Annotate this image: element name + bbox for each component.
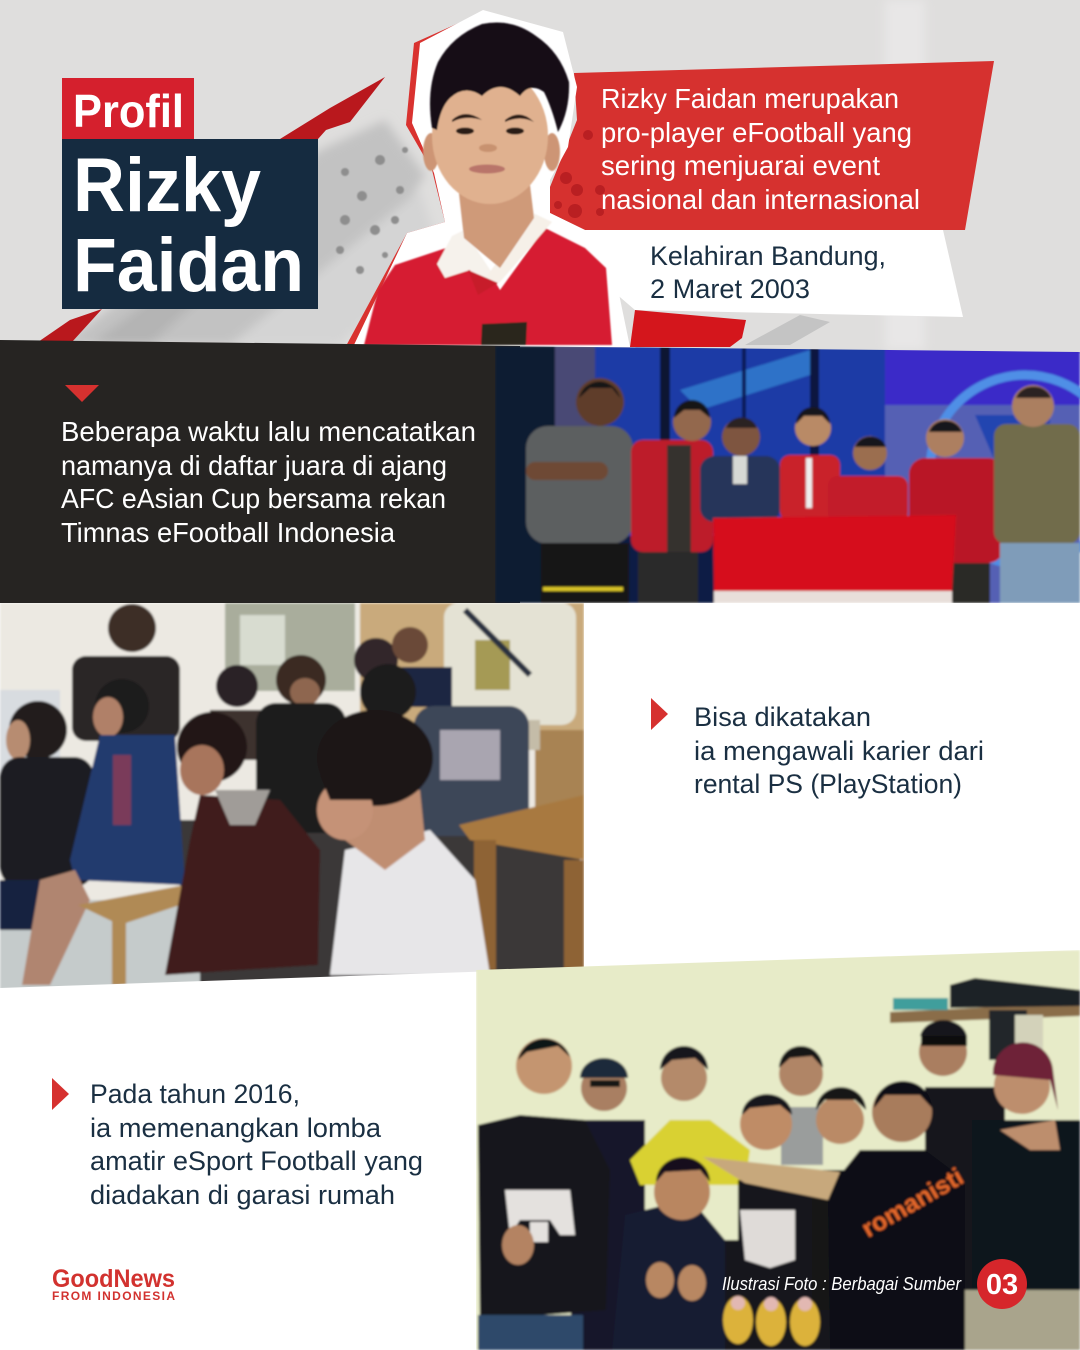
career text: Bisa dikatakan xyxy=(694,702,871,732)
lower dark mass of group xyxy=(722,1238,832,1350)
photo: garage tournament group xyxy=(476,950,1080,1350)
birth text xyxy=(650,241,886,304)
logo: GoodNews from Indonesia: FROM INDONESIA xyxy=(52,1289,175,1303)
competition text: diadakan di garasi rumah xyxy=(90,1180,395,1210)
cardboard placard xyxy=(703,1157,840,1200)
right man xyxy=(972,1120,1080,1295)
title block xyxy=(62,78,318,309)
blue hoodie man xyxy=(95,679,149,733)
trophies xyxy=(723,1296,820,1346)
person 5 xyxy=(828,476,908,522)
left man xyxy=(516,1038,572,1094)
front man xyxy=(642,1206,726,1350)
icon: red right triangle xyxy=(52,1078,69,1110)
competition text xyxy=(90,1079,423,1210)
logo: GoodNews from Indonesia: GoodNews xyxy=(52,1265,175,1293)
flag xyxy=(713,515,956,592)
competition text: amatir eSport Football yang xyxy=(90,1146,423,1176)
achievement text: Timnas eFootball Indonesia xyxy=(61,517,395,548)
label: Profil: Profil xyxy=(73,85,184,137)
hair xyxy=(430,22,569,132)
neck and face xyxy=(458,185,534,268)
boy beside xyxy=(818,1168,846,1308)
name: Rizky Faidan xyxy=(62,139,318,309)
red brush strokes xyxy=(38,77,385,342)
name: Rizky Faidan: Rizky xyxy=(73,143,261,228)
brown hoodie man xyxy=(165,795,320,975)
person 1 xyxy=(526,426,633,544)
achievement text: Beberapa waktu lalu mencatatkan xyxy=(61,416,476,447)
credit caption: Ilustrasi Foto : Berbagai Sumber xyxy=(722,1274,962,1294)
achievement text xyxy=(61,416,476,548)
name: Rizky Faidan: Faidan xyxy=(73,223,304,308)
standing white-shirt man xyxy=(444,603,576,725)
person 3 xyxy=(700,456,780,522)
competition text: Pada tahun 2016, xyxy=(90,1079,300,1109)
white text panel: 2016 competition xyxy=(52,1078,423,1210)
red description panel xyxy=(550,61,994,230)
description text: sering menjuarai event xyxy=(601,150,880,181)
photo: rental PS gathering xyxy=(0,603,584,990)
description text: Rizky Faidan merupakan xyxy=(601,83,899,114)
boy in centre xyxy=(736,1178,814,1242)
white t-shirt man xyxy=(330,830,490,975)
birth text: 2 Maret 2003 xyxy=(650,274,810,304)
white birth panel xyxy=(585,230,963,317)
portrait of Rizky Faidan xyxy=(346,10,630,347)
photo: garage tournament group: romanisti xyxy=(857,1163,968,1243)
shelf and bag xyxy=(890,1003,1080,1023)
page number badge xyxy=(977,1259,1027,1309)
stool xyxy=(78,885,185,925)
table xyxy=(459,795,584,860)
person 6 xyxy=(909,458,1004,563)
career text: ia mengawali karier dari xyxy=(694,736,984,766)
career text: rental PS (PlayStation) xyxy=(694,769,962,799)
description text: nasional dan internasional xyxy=(601,184,920,215)
achievement text: namanya di daftar juara di ajang xyxy=(61,450,447,481)
white text panel: rental PS xyxy=(651,698,984,799)
person 7 xyxy=(994,424,1080,544)
description text xyxy=(601,83,920,215)
jacket man xyxy=(828,1150,965,1350)
career text xyxy=(694,702,984,799)
hero textured background xyxy=(0,0,1080,354)
competition text: ia memenangkan lomba xyxy=(90,1113,382,1143)
back row xyxy=(580,1076,628,1112)
red brush under birth panel xyxy=(630,310,746,347)
page number badge: 03 xyxy=(986,1269,1018,1301)
back people xyxy=(108,604,156,652)
achievement text: AFC eAsian Cup bersama rekan xyxy=(61,483,446,514)
dark text band xyxy=(0,340,520,603)
jersey xyxy=(364,228,612,345)
person 2 xyxy=(631,440,713,552)
icon: red right triangle xyxy=(651,698,668,730)
black shirt man xyxy=(276,655,326,705)
left man xyxy=(9,701,67,759)
photo: Timnas eFootball team with flag xyxy=(495,346,1080,603)
birth text: Kelahiran Bandung, xyxy=(650,241,886,271)
person 4 xyxy=(780,455,840,521)
icon: red down triangle xyxy=(65,385,99,402)
description text: pro-player eFootball yang xyxy=(601,117,912,148)
